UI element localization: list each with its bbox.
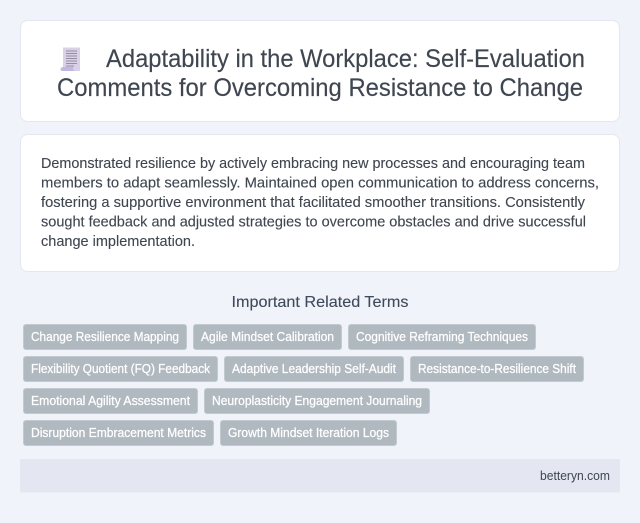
chip: Adaptive Leadership Self-Audit (232, 362, 397, 376)
chip (220, 420, 396, 446)
chip (194, 324, 342, 350)
summary text: fostering a supportive environment that facilitated smoother transitions. Consistently (41, 195, 586, 211)
chip: Flexibility Quotient (FQ) Feedback (31, 362, 211, 376)
chip: Growth Mindset Iteration Logs (228, 426, 389, 440)
chip (204, 388, 430, 414)
chip (24, 356, 218, 382)
footer credit: betteryn.com (540, 469, 610, 483)
chip: Cognitive Reframing Techniques (356, 330, 528, 344)
chip (24, 388, 198, 414)
section heading: important related terms: Important Related Terms (232, 294, 408, 311)
summary panel (20, 134, 620, 272)
chip: Change Resilience Mapping (31, 330, 179, 344)
chip: Agile Mindset Calibration (201, 330, 334, 344)
chip: Emotional Agility Assessment (31, 394, 191, 408)
title: Adaptability in the Workplace: Self-Evaluation (106, 45, 585, 73)
summary text: members to adapt seamlessly. Maintained open communication to address concerns, (41, 176, 599, 192)
chip (410, 356, 584, 382)
title (57, 45, 585, 102)
footer bar (20, 459, 620, 492)
chip (348, 324, 536, 350)
term chips (24, 324, 584, 446)
summary text (41, 156, 599, 250)
icon: document scroll (60, 48, 80, 71)
header panel (20, 20, 620, 122)
title: Comments for Overcoming Resistance to Change (57, 74, 583, 102)
summary text: sought feedback and adjusted strategies to overcome obstacles and drive successful (41, 214, 586, 230)
summary text: Demonstrated resilience by actively embracing new processes and encouraging team (41, 156, 585, 172)
chip: Resistance-to-Resilience Shift (418, 362, 576, 376)
chip (24, 324, 186, 350)
chip: Disruption Embracement Metrics (31, 426, 206, 440)
chip: Neuroplasticity Engagement Journaling (212, 394, 422, 408)
summary text: change implementation. (41, 234, 195, 250)
chip (224, 356, 404, 382)
chip (24, 420, 214, 446)
